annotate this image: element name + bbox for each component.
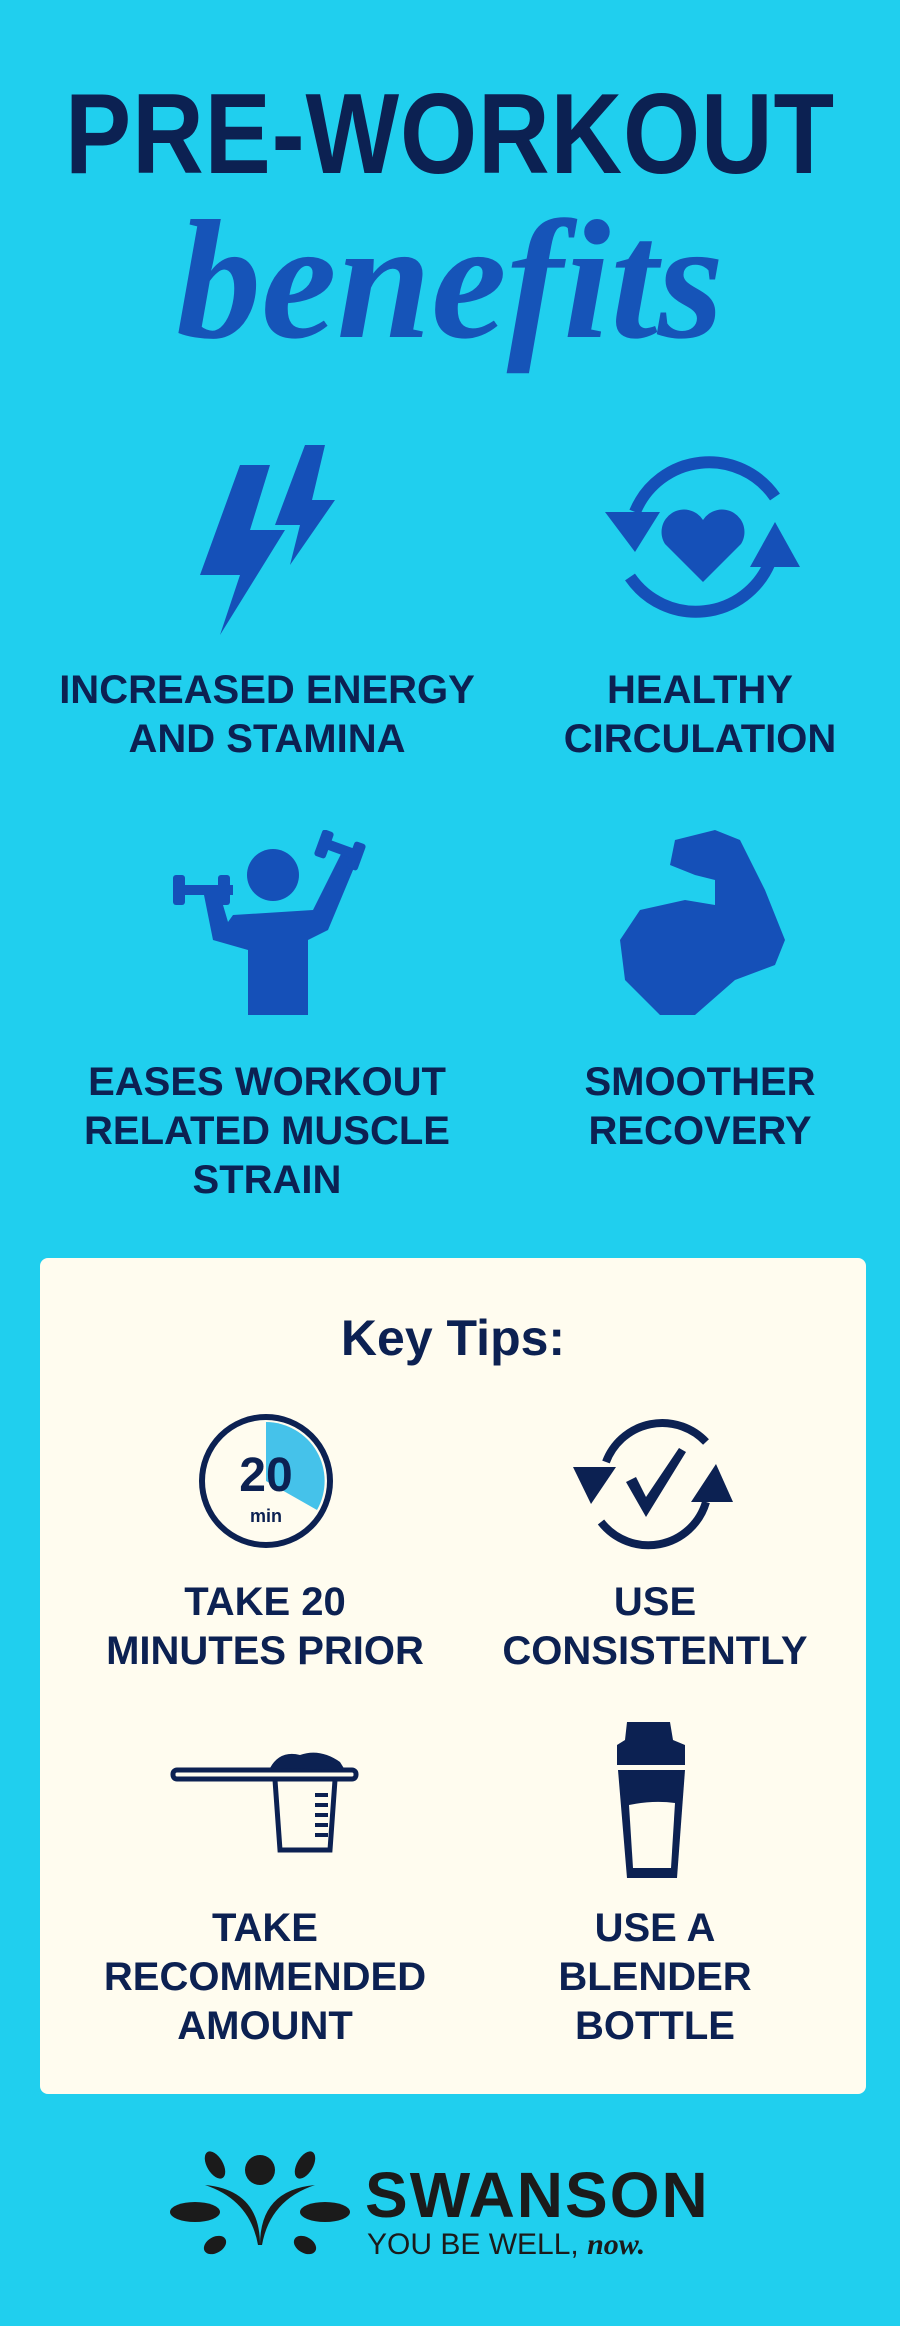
title: PRE-WORKOUT <box>65 71 835 198</box>
icon: flexed arm <box>620 830 785 1015</box>
text: circulation: HEALTHY <box>607 668 793 712</box>
text: recommended: TAKE <box>212 1906 318 1950</box>
tagline: YOU BE WELL, now. <box>367 2228 645 2261</box>
icon: clock 20 min: min <box>250 1506 282 1526</box>
brand name: SWANSON <box>365 2159 710 2231</box>
text: blender bottle: USE A <box>595 1906 715 1950</box>
logo: swanson <box>170 2151 710 2261</box>
icon: shaker bottle <box>617 1722 685 1878</box>
text: recovery: RECOVERY <box>588 1109 812 1153</box>
text: blender bottle: BLENDER <box>558 1955 752 1999</box>
panel: key tips <box>40 1258 866 2094</box>
text: recommended <box>104 1906 426 2048</box>
text: energy: AND STAMINA <box>128 717 406 761</box>
text: take 20: MINUTES PRIOR <box>106 1629 424 1673</box>
text: recommended: RECOMMENDED <box>104 1955 426 1999</box>
text: consistently <box>502 1580 808 1673</box>
text: recommended: AMOUNT <box>177 2004 353 2048</box>
text: muscle: STRAIN <box>193 1158 341 1202</box>
text: consistently: CONSISTENTLY <box>502 1629 808 1673</box>
icon: lightning <box>200 445 335 635</box>
text: circulation <box>564 668 836 761</box>
text: muscle <box>84 1060 450 1202</box>
text: muscle: EASES WORKOUT <box>88 1060 446 1104</box>
text: circulation: CIRCULATION <box>564 717 836 761</box>
text: blender bottle: BOTTLE <box>575 2004 735 2048</box>
text: energy: INCREASED ENERGY <box>59 668 475 712</box>
text: muscle: RELATED MUSCLE <box>84 1109 450 1153</box>
icon: scoop <box>170 1752 358 1852</box>
icon: heart circulation <box>605 456 800 618</box>
text: consistently: USE <box>614 1580 696 1624</box>
icon: clock 20 min: 20 <box>239 1449 293 1502</box>
icon: check cycle <box>573 1419 733 1550</box>
script subtitle: benefits <box>176 186 724 374</box>
heading: key tips: Key Tips: <box>341 1310 565 1366</box>
text: take 20: TAKE 20 <box>184 1580 346 1624</box>
text: blender bottle <box>558 1906 752 2048</box>
icon: clock 20 min <box>199 1414 333 1548</box>
text: recovery: SMOOTHER <box>584 1060 816 1104</box>
text: take 20 <box>106 1580 424 1673</box>
icon: dumbbell person <box>173 830 366 1015</box>
text: recovery <box>584 1060 816 1153</box>
icon: swanson figure <box>170 2151 350 2254</box>
text: energy <box>59 668 475 761</box>
